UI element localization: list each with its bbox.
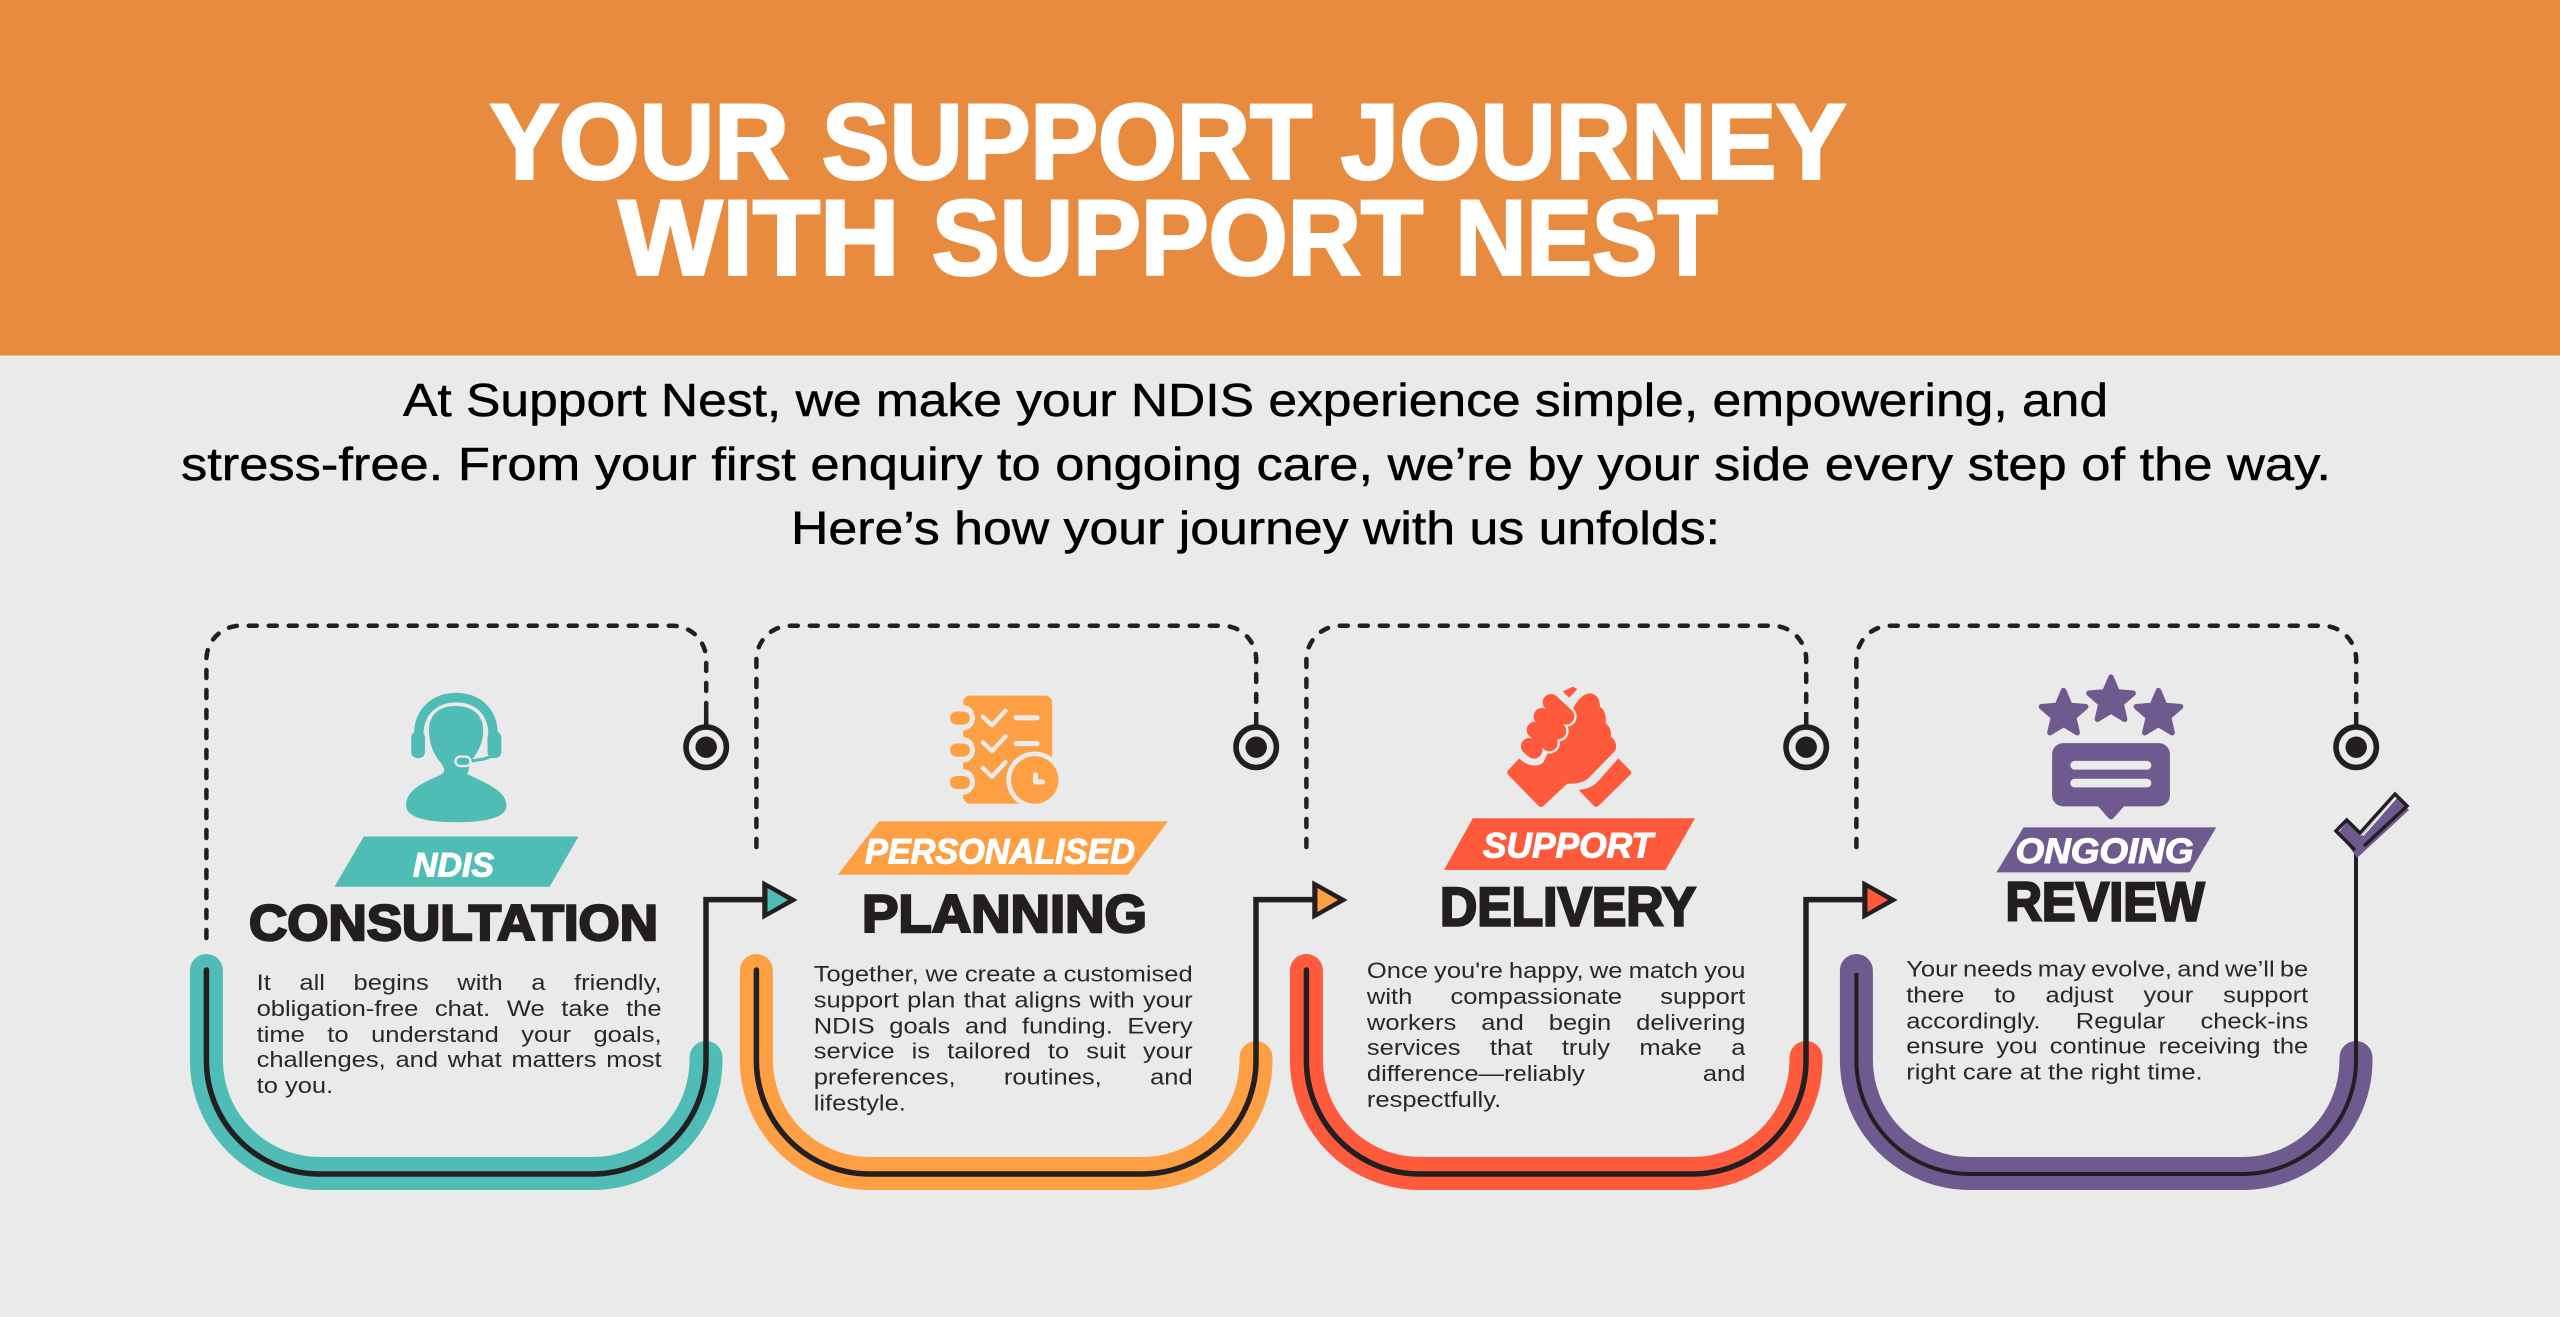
body text: Your needs may evolve, and we’ll be (1906, 957, 2308, 982)
body text (257, 970, 662, 1100)
header band (0, 0, 2560, 356)
dashed frame with end node (756, 626, 1276, 847)
intro text: stress-free. From your first enquiry to ongoing care, we’re by your side every step of the way. (181, 438, 2331, 490)
dashed frame with end node (1306, 626, 1826, 847)
icon: clasped hands (1507, 687, 1631, 807)
dashed frame with end node (1856, 626, 2376, 847)
body text: obligation-free chat. We take the (257, 996, 662, 1021)
panel: review step (1856, 626, 2409, 1174)
body text: NDIS goals and funding. Every (814, 1013, 1193, 1038)
body text: support plan that aligns with your (814, 987, 1193, 1012)
body text: lifestyle. (814, 1090, 906, 1115)
title: SUPPORT (932, 178, 1423, 298)
body text: It all begins with a friendly, (257, 970, 662, 995)
title: SUPPORT (822, 82, 1312, 202)
label banner: NDIS: NDIS (413, 846, 494, 884)
intro text (181, 374, 2331, 554)
label banner: personalised: PERSONALISED (865, 832, 1135, 872)
heading: planning: PLANNING (862, 885, 1147, 944)
title: NEST (1456, 178, 1718, 298)
title: YOUR (490, 82, 789, 202)
body text: ensure you continue receiving the (1906, 1034, 2308, 1059)
red u-shaped track (1306, 970, 1806, 1174)
title: WITH (618, 178, 900, 298)
label banner: NDIS (334, 836, 578, 887)
body text: to you. (257, 1073, 333, 1098)
body text: accordingly. Regular check-ins (1906, 1008, 2308, 1033)
title (490, 82, 1846, 298)
title: JOURNEY (1341, 82, 1846, 202)
heading: consultation: CONSULTATION (249, 894, 658, 951)
body text (1367, 958, 1745, 1118)
body text: Once you're happy, we match you (1367, 958, 1745, 983)
icon: person with headset (406, 698, 506, 822)
icon: checklist with clock (949, 696, 1063, 808)
label banner: support (1444, 818, 1695, 870)
icon: stars and speech bubble (2041, 677, 2181, 819)
intro text: Here’s how your journey with us unfolds: (791, 502, 1720, 554)
panel: consultation step (206, 626, 792, 1174)
body text: with compassionate support (1367, 984, 1745, 1009)
heading: review: REVIEW (2006, 872, 2205, 932)
body text: preferences, routines, and (814, 1065, 1193, 1090)
body text: services that truly make a (1367, 1035, 1745, 1060)
body text: service is tailored to suit your (814, 1039, 1193, 1064)
icon: check mark (2336, 794, 2409, 858)
dashed frame with end node (206, 626, 726, 938)
body text: workers and begin delivering (1367, 1009, 1745, 1034)
teal u-shaped track (206, 970, 706, 1174)
panel: planning step (756, 626, 1342, 1174)
body text: time to understand your goals, (257, 1022, 662, 1047)
body text (814, 962, 1193, 1122)
body text: difference—reliably and (1367, 1061, 1745, 1086)
label banner: support: SUPPORT (1483, 826, 1656, 866)
body text: Together, we create a customised (814, 962, 1193, 986)
body text: respectfully. (1367, 1087, 1501, 1112)
label banner: ongoing: ONGOING (2016, 831, 2194, 871)
connector arrow to delivery (756, 885, 1342, 1174)
connector arrow to review (1306, 885, 1892, 1174)
purple u-shaped track (1856, 970, 2356, 1174)
label banner: personalised (838, 821, 1168, 875)
orange u-shaped track (756, 970, 1256, 1174)
body text: there to adjust your support (1906, 982, 2308, 1007)
body text: challenges, and what matters most (257, 1048, 662, 1073)
body text: right care at the right time. (1906, 1060, 2203, 1085)
body text (1906, 957, 2308, 1087)
heading: delivery: DELIVERY (1440, 876, 1696, 938)
intro text: At Support Nest, we make your NDIS experience simple, empowering, and (403, 374, 2108, 426)
panel: delivery step (1306, 626, 1892, 1174)
label banner: ongoing (1996, 827, 2216, 872)
connector line to check mark (1856, 850, 2356, 1174)
connector arrow to planning (206, 885, 792, 1174)
